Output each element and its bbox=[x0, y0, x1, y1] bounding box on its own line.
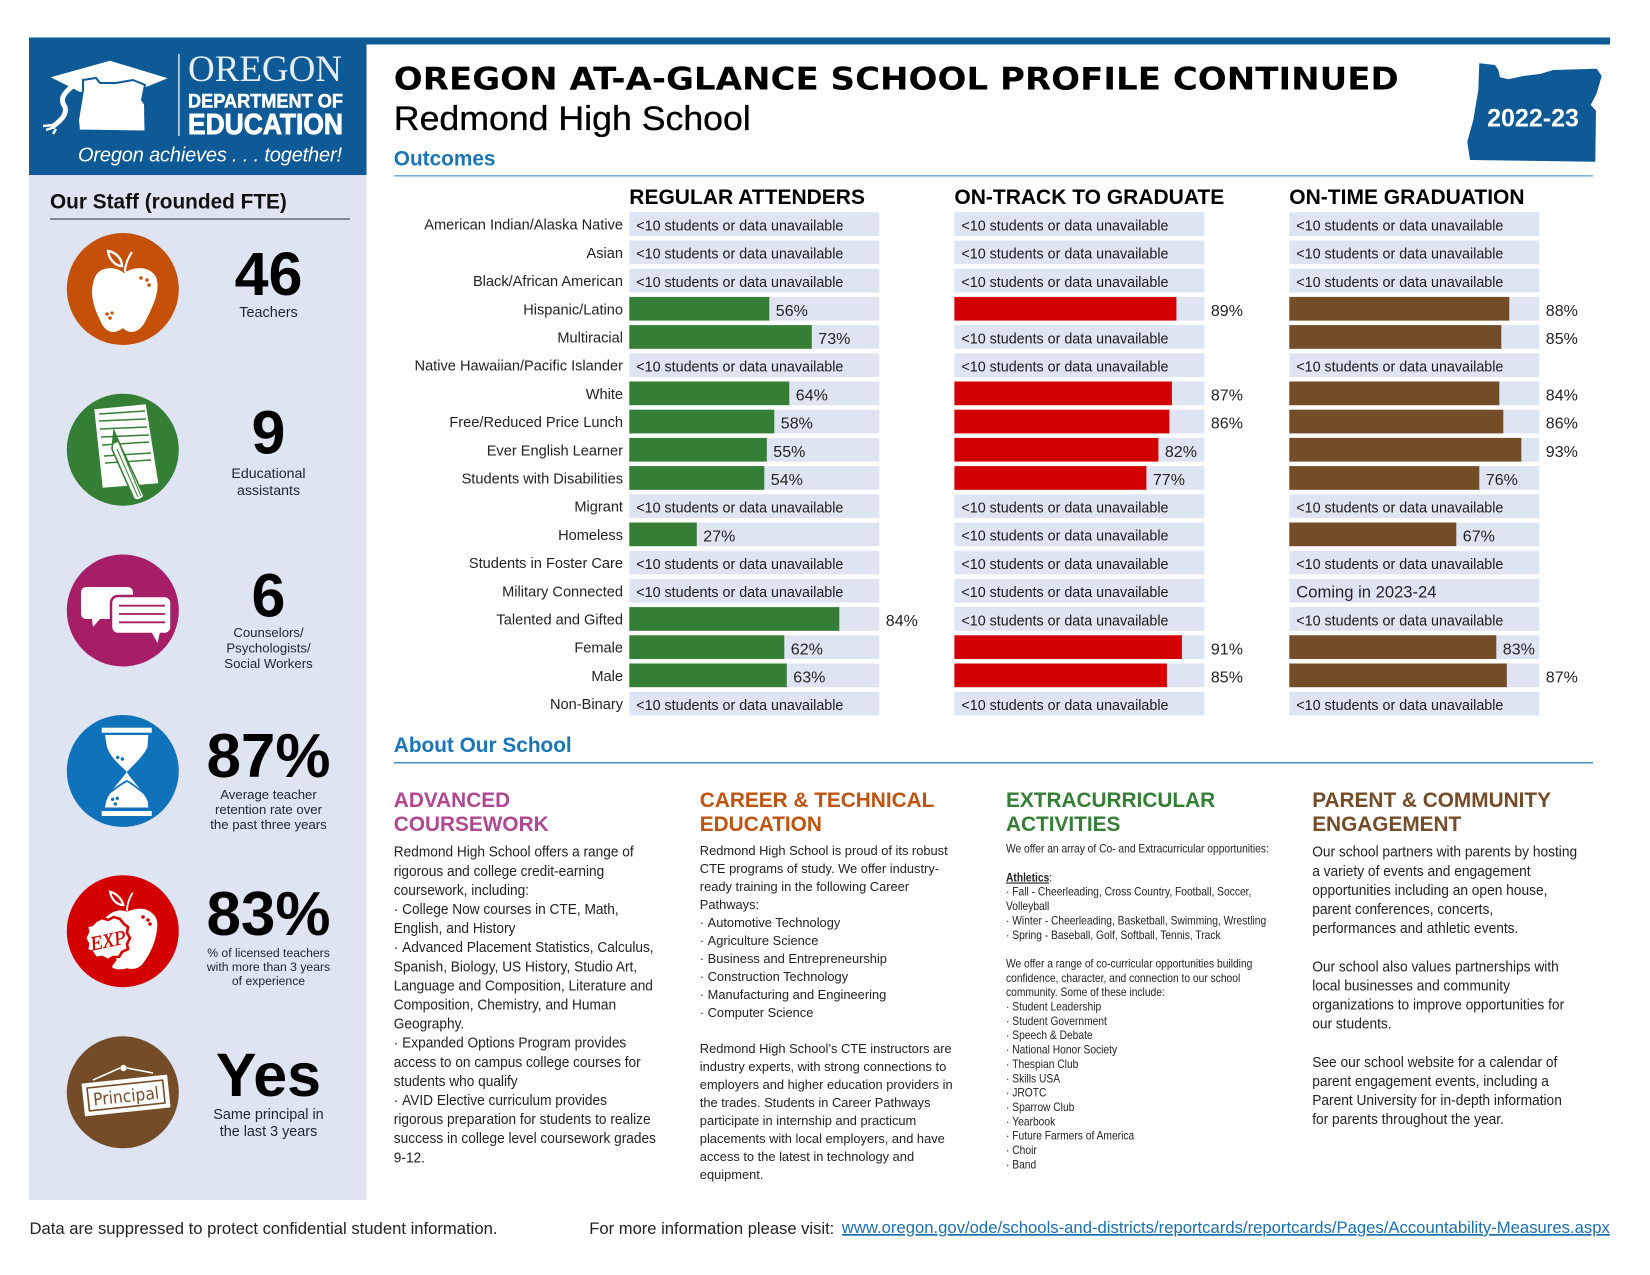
text: extracurricular activities: · Sparrow Club bbox=[1006, 1101, 1074, 1114]
bar chart: on-time graduation: Coming in 2023-24 bbox=[1296, 583, 1437, 602]
text: career and technical education: · Agriculture Science bbox=[700, 933, 818, 948]
icon: hourglass bbox=[67, 715, 179, 827]
text: advanced coursework: 9-12. bbox=[394, 1149, 425, 1165]
logo: Oregon Department of Education bbox=[29, 38, 366, 175]
bar chart: on-track to graduate: <10 students or data unavailable bbox=[961, 529, 1169, 545]
stat: same principal: Yes bbox=[216, 1041, 321, 1109]
text: parent and community engagement: Parent University for in-depth information bbox=[1312, 1092, 1562, 1108]
student group row labels: Non-Binary bbox=[550, 697, 624, 713]
footer more information: www.oregon.gov/ode/schools-and-districts/reportcards/reportcards/Pages/Accountability-Measures.aspx bbox=[841, 1218, 1610, 1237]
bar chart: on-track to graduate: <10 students or data unavailable bbox=[961, 331, 1169, 347]
heading: Outcomes: Outcomes bbox=[394, 148, 496, 170]
bar chart: regular attenders: <10 students or data unavailable bbox=[636, 359, 843, 375]
bar chart: regular attenders: <10 students or data unavailable bbox=[636, 585, 843, 601]
stat: teachers bbox=[67, 233, 302, 345]
stat: same principal: the last 3 years bbox=[220, 1124, 317, 1140]
bar chart: on-track to graduate: <10 students or data unavailable bbox=[961, 219, 1169, 235]
text: parent and community engagement: See our school website for a calendar of bbox=[1312, 1054, 1557, 1070]
text: career and technical education: Redmond High School is proud of its robust bbox=[700, 843, 948, 858]
footer note: Data are suppressed to protect confidential student information. bbox=[30, 1219, 498, 1238]
text: parent and community engagement: parent engagement events, including a bbox=[1312, 1073, 1549, 1089]
text: career and technical education: Redmond High School’s CTE instructors are bbox=[700, 1041, 952, 1056]
student group row labels: Hispanic/Latino bbox=[523, 302, 623, 318]
bar chart: on-time graduation: 93% bbox=[1546, 444, 1578, 461]
text: parent and community engagement: for parents throughout the year. bbox=[1312, 1111, 1504, 1127]
text: extracurricular activities: · Yearbook bbox=[1006, 1116, 1056, 1129]
text: extracurricular activities: Volleyball bbox=[1006, 901, 1049, 913]
bar chart: on-track to graduate: 87% bbox=[1211, 388, 1243, 404]
text: extracurricular activities: We offer a range of co-curricular opportunities building bbox=[1006, 958, 1252, 971]
bar chart: on-time graduation bbox=[1289, 212, 1578, 715]
stat: teachers: 46 bbox=[235, 240, 302, 308]
column heading: on-time graduation: ON-TIME GRADUATION bbox=[1289, 186, 1525, 209]
bar chart: on-time graduation: 88% bbox=[1546, 303, 1578, 320]
stat: teacher retention: 87% bbox=[206, 722, 331, 791]
text: parent and community engagement: performances and athletic events. bbox=[1312, 920, 1518, 936]
stat: teacher experience: with more than 3 years bbox=[206, 960, 330, 974]
text: advanced coursework: · College Now courses in CTE, Math, bbox=[394, 901, 619, 917]
text: advanced coursework: Geography. bbox=[394, 1015, 464, 1032]
top rule bbox=[29, 38, 1610, 44]
icon: bitten apple bbox=[67, 875, 179, 987]
text: advanced coursework: · AVID Elective curriculum provides bbox=[394, 1092, 607, 1108]
footer more information: For more information please visit: bbox=[589, 1219, 834, 1238]
text: extracurricular activities: · Band bbox=[1006, 1159, 1036, 1172]
icon: paper and pencil bbox=[67, 394, 179, 506]
bar chart: on-track to graduate: <10 students or data unavailable bbox=[961, 247, 1169, 263]
student group row labels: Military Connected bbox=[502, 584, 623, 600]
text: extracurricular activities: · Choir bbox=[1006, 1145, 1037, 1157]
stat: same principal bbox=[67, 1036, 324, 1148]
bar chart: on-track to graduate: 82% bbox=[1165, 444, 1197, 461]
text: advanced coursework: access to on campus college courses for bbox=[394, 1053, 641, 1070]
bar chart: on-track to graduate: <10 students or data unavailable bbox=[961, 613, 1169, 629]
stat: teacher retention: the past three years bbox=[210, 817, 327, 832]
bar chart: on-track to graduate: <10 students or data unavailable bbox=[961, 500, 1169, 516]
heading: our staff: Our Staff (rounded FTE) bbox=[50, 190, 287, 214]
stat: teacher experience: 83% bbox=[206, 880, 331, 949]
bar chart: regular attenders: 73% bbox=[818, 331, 850, 348]
text: advanced coursework: Redmond High School offers a range of bbox=[394, 843, 634, 860]
column heading: regular attenders: REGULAR ATTENDERS bbox=[629, 186, 865, 209]
text: parent and community engagement: our students. bbox=[1312, 1015, 1392, 1032]
text: parent and community engagement: opportunities including an open house, bbox=[1312, 882, 1547, 898]
bar chart: on-time graduation: <10 students or data unavailable bbox=[1296, 500, 1503, 516]
bar chart: on-track to graduate: <10 students or data unavailable bbox=[961, 698, 1169, 714]
logo: Oregon Department of Education: EDUCATION bbox=[188, 109, 343, 141]
text: extracurricular activities: · Winter - Cheerleading, Basketball, Swimming, Wrestling bbox=[1006, 915, 1266, 928]
school name: Redmond High School bbox=[394, 100, 751, 138]
text: career and technical education: · Business and Entrepreneurship bbox=[700, 951, 887, 966]
text: advanced coursework: Spanish, Biology, US History, Studio Art, bbox=[394, 958, 637, 974]
text: career and technical education: Pathways: bbox=[700, 897, 759, 912]
heading: parent and community engagement: ENGAGEMENT bbox=[1312, 813, 1462, 836]
bar chart: regular attenders: 55% bbox=[773, 444, 805, 461]
text: extracurricular activities: · Future Farmers of America bbox=[1006, 1130, 1135, 1143]
bar chart: on-track to graduate: 77% bbox=[1153, 472, 1185, 489]
student group row labels: Male bbox=[591, 669, 623, 685]
text: career and technical education: · Computer Science bbox=[700, 1005, 813, 1020]
text: extracurricular activities: · Fall - Cheerleading, Cross Country, Football, Soccer, bbox=[1006, 886, 1251, 899]
text: extracurricular activities: · Thespian Club bbox=[1006, 1058, 1078, 1071]
student group row labels: Native Hawaiian/Pacific Islander bbox=[415, 359, 623, 375]
stat: counselors: Counselors/ bbox=[233, 625, 304, 640]
bar chart: on-track to graduate: 86% bbox=[1211, 416, 1243, 433]
panel: sidebar background bbox=[29, 175, 366, 1200]
icon: Oregon map with year: 2022-23 bbox=[1487, 105, 1579, 133]
student group row labels bbox=[415, 218, 624, 713]
text: advanced coursework: success in college level coursework grades bbox=[394, 1130, 656, 1146]
student group row labels: Free/Reduced Price Lunch bbox=[449, 415, 623, 431]
icon: principal sign bbox=[67, 1036, 179, 1148]
bar chart: on-time graduation: <10 students or data unavailable bbox=[1296, 613, 1503, 629]
bar chart: on-time graduation: <10 students or data unavailable bbox=[1296, 247, 1503, 263]
bar chart: on-time graduation: <10 students or data unavailable bbox=[1296, 557, 1503, 573]
text: career and technical education: industry experts, with strong connections to bbox=[700, 1059, 946, 1074]
text: extracurricular activities: · Skills USA bbox=[1006, 1073, 1061, 1085]
student group row labels: Migrant bbox=[574, 500, 623, 516]
bar chart: on-time graduation: 67% bbox=[1463, 528, 1495, 546]
bar chart: on-time graduation: 76% bbox=[1486, 472, 1518, 489]
text: career and technical education: · Automotive Technology bbox=[700, 915, 841, 930]
logo: Oregon Department of Education: OREGON bbox=[188, 48, 342, 89]
bar chart: on-track to graduate: 85% bbox=[1211, 670, 1243, 686]
text: extracurricular activities: · Student Government bbox=[1006, 1015, 1107, 1028]
bar chart: regular attenders: <10 students or data unavailable bbox=[636, 557, 843, 573]
stat: teacher retention: retention rate over bbox=[215, 802, 323, 817]
text: extracurricular activities: We offer an array of Co- and Extracurricular opportunities: bbox=[1006, 843, 1269, 856]
text: advanced coursework: · Expanded Options Program provides bbox=[394, 1034, 626, 1051]
stat: counselors: 6 bbox=[252, 562, 285, 630]
bar chart: on-time graduation: 85% bbox=[1546, 331, 1578, 348]
stat: counselors: Psychologists/ bbox=[226, 640, 311, 656]
text: career and technical education: access to the latest in technology and bbox=[700, 1149, 914, 1164]
heading: advanced coursework: COURSEWORK bbox=[394, 813, 549, 836]
bar chart: regular attenders: 84% bbox=[886, 613, 918, 630]
stat: same principal: Same principal in bbox=[213, 1107, 324, 1123]
bar chart: on-time graduation: 84% bbox=[1546, 388, 1578, 404]
stat: educational assistants: 9 bbox=[252, 398, 285, 466]
text: advanced coursework: coursework, including: bbox=[394, 882, 529, 898]
text: advanced coursework: Composition, Chemistry, and Human bbox=[394, 996, 616, 1013]
heading: career and technical education: CAREER & TECHNICAL bbox=[700, 789, 935, 812]
stat: teacher experience: of experience bbox=[232, 974, 305, 988]
icon: bitten apple: EXP bbox=[87, 926, 128, 956]
bar chart: regular attenders: <10 students or data unavailable bbox=[636, 219, 843, 235]
text: parent and community engagement: organizations to improve opportunities for bbox=[1312, 996, 1564, 1013]
bar chart: regular attenders: 27% bbox=[703, 528, 735, 546]
logo: Oregon Department of Education: DEPARTMENT OF bbox=[188, 92, 343, 113]
student group row labels: Black/African American bbox=[473, 274, 623, 290]
text: extracurricular activities: confidence, character, and connection to our school bbox=[1006, 972, 1240, 985]
text: extracurricular activities: · Student Leadership bbox=[1006, 1001, 1101, 1014]
text: career and technical education: the trades. Students in Career Pathways bbox=[700, 1095, 931, 1110]
bar chart: on-track to graduate: <10 students or data unavailable bbox=[961, 557, 1169, 573]
bar chart: regular attenders: <10 students or data unavailable bbox=[636, 247, 843, 263]
bar chart: on-time graduation: <10 students or data unavailable bbox=[1296, 219, 1503, 235]
text: extracurricular activities: : bbox=[1049, 872, 1052, 885]
bar chart: regular attenders: 64% bbox=[796, 388, 828, 404]
stat: educational assistants: assistants bbox=[237, 483, 300, 499]
heading: advanced coursework: ADVANCED bbox=[394, 789, 510, 812]
bar chart: regular attenders: 62% bbox=[791, 641, 823, 658]
text: advanced coursework: rigorous and college credit-earning bbox=[394, 862, 604, 879]
text: parent and community engagement: Our school also values partnerships with bbox=[1312, 958, 1559, 974]
text: advanced coursework: English, and History bbox=[394, 920, 515, 936]
bar chart: regular attenders bbox=[629, 212, 918, 715]
icon: principal sign: Principal bbox=[92, 1084, 160, 1110]
bar chart: on-time graduation: 87% bbox=[1546, 670, 1578, 686]
text: extracurricular activities: · JROTC bbox=[1006, 1087, 1047, 1100]
stat: educational assistants: Educational bbox=[231, 466, 306, 482]
text: career and technical education: placements with local employers, and have bbox=[700, 1131, 945, 1146]
text: parent and community engagement: Our school partners with parents by hosting bbox=[1312, 843, 1577, 860]
stat: counselors bbox=[67, 554, 313, 671]
bar chart: on-track to graduate bbox=[954, 212, 1243, 715]
bar chart: regular attenders: 54% bbox=[771, 472, 803, 489]
heading: parent and community engagement: PARENT & COMMUNITY bbox=[1312, 789, 1551, 812]
student group row labels: Homeless bbox=[558, 528, 623, 544]
heading: extracurricular activities: EXTRACURRICULAR bbox=[1006, 789, 1215, 812]
heading: about our school: About Our School bbox=[394, 734, 572, 757]
bar chart: on-track to graduate: <10 students or data unavailable bbox=[961, 359, 1169, 375]
student group row labels: Students in Foster Care bbox=[469, 556, 623, 572]
bar chart: regular attenders: <10 students or data unavailable bbox=[636, 500, 843, 516]
bar chart: regular attenders: 63% bbox=[793, 670, 825, 686]
logo: Oregon Department of Education: Oregon achieves . . . together! bbox=[78, 145, 342, 167]
text: parent and community engagement: parent conferences, concerts, bbox=[1312, 901, 1493, 917]
stat: teachers: Teachers bbox=[239, 305, 298, 321]
icon: Oregon map with year bbox=[1467, 63, 1602, 162]
icon: apple bbox=[67, 233, 179, 345]
student group row labels: Female bbox=[574, 641, 623, 657]
bar chart: on-time graduation: <10 students or data unavailable bbox=[1296, 275, 1503, 291]
bar chart: on-track to graduate: 89% bbox=[1211, 303, 1243, 320]
text: parent and community engagement: a variety of events and engagement bbox=[1312, 863, 1531, 879]
student group row labels: Ever English Learner bbox=[487, 443, 623, 459]
bar chart: regular attenders: 58% bbox=[781, 416, 813, 433]
bar chart: on-track to graduate: 91% bbox=[1211, 641, 1243, 658]
text: career and technical education: employers and higher education providers in bbox=[700, 1077, 953, 1092]
stat: counselors: Social Workers bbox=[224, 656, 313, 671]
bar chart: on-time graduation: <10 students or data unavailable bbox=[1296, 359, 1503, 375]
bar chart: regular attenders: <10 students or data unavailable bbox=[636, 275, 843, 291]
text: career and technical education: ready training in the following Career bbox=[700, 879, 910, 894]
bar chart: on-time graduation: 86% bbox=[1546, 416, 1578, 433]
stat: educational assistants bbox=[67, 394, 306, 506]
text: extracurricular activities: community. Some of these include: bbox=[1006, 987, 1165, 999]
student group row labels: Students with Disabilities bbox=[462, 472, 623, 488]
student group row labels: Talented and Gifted bbox=[496, 612, 623, 628]
text: career and technical education: equipment. bbox=[700, 1167, 763, 1182]
student group row labels: Asian bbox=[586, 246, 623, 262]
text: extracurricular activities: · Speech & Debate bbox=[1006, 1030, 1093, 1042]
stat: teacher experience: % of licensed teachers bbox=[207, 946, 330, 960]
text: career and technical education: · Manufacturing and Engineering bbox=[700, 987, 886, 1002]
text: advanced coursework: students who qualify bbox=[394, 1073, 518, 1089]
text: career and technical education: CTE programs of study. We offer industry- bbox=[700, 861, 939, 876]
student group row labels: American Indian/Alaska Native bbox=[424, 218, 623, 234]
text: career and technical education: · Construction Technology bbox=[700, 969, 849, 984]
stat: teacher retention: Average teacher bbox=[220, 787, 317, 802]
stat: teacher experience bbox=[67, 875, 331, 988]
bar chart: on-track to graduate: <10 students or data unavailable bbox=[961, 275, 1169, 291]
bar chart: on-time graduation: <10 students or data unavailable bbox=[1296, 698, 1503, 714]
text: advanced coursework: · Advanced Placement Statistics, Calculus, bbox=[394, 939, 654, 955]
text: career and technical education: participate in internship and practicum bbox=[700, 1113, 916, 1128]
heading: extracurricular activities: ACTIVITIES bbox=[1006, 813, 1121, 836]
bar chart: on-time graduation: 83% bbox=[1503, 641, 1535, 658]
heading: career and technical education: EDUCATION bbox=[700, 813, 822, 836]
text: extracurricular activities: Athletics bbox=[1006, 872, 1049, 885]
bar chart: regular attenders: 56% bbox=[776, 303, 808, 320]
column heading: on-track to graduate: ON-TRACK TO GRADUATE bbox=[954, 186, 1224, 209]
icon: speech bubbles bbox=[67, 554, 179, 666]
text: extracurricular activities: · National Honor Society bbox=[1006, 1044, 1118, 1057]
text: advanced coursework: rigorous preparation for students to realize bbox=[394, 1111, 651, 1127]
bar chart: regular attenders: <10 students or data unavailable bbox=[636, 698, 843, 714]
student group row labels: Multiracial bbox=[557, 330, 623, 346]
text: parent and community engagement: local businesses and community bbox=[1312, 977, 1510, 993]
bar chart: on-track to graduate: <10 students or data unavailable bbox=[961, 585, 1169, 601]
stat: teacher retention bbox=[67, 715, 331, 832]
text: extracurricular activities: · Spring - Baseball, Golf, Softball, Tennis, Track bbox=[1006, 929, 1221, 942]
student group row labels: White bbox=[586, 387, 623, 403]
title: OREGON AT-A-GLANCE SCHOOL PROFILE CONTINUED bbox=[394, 61, 1399, 97]
text: advanced coursework: Language and Composition, Literature and bbox=[394, 977, 653, 993]
